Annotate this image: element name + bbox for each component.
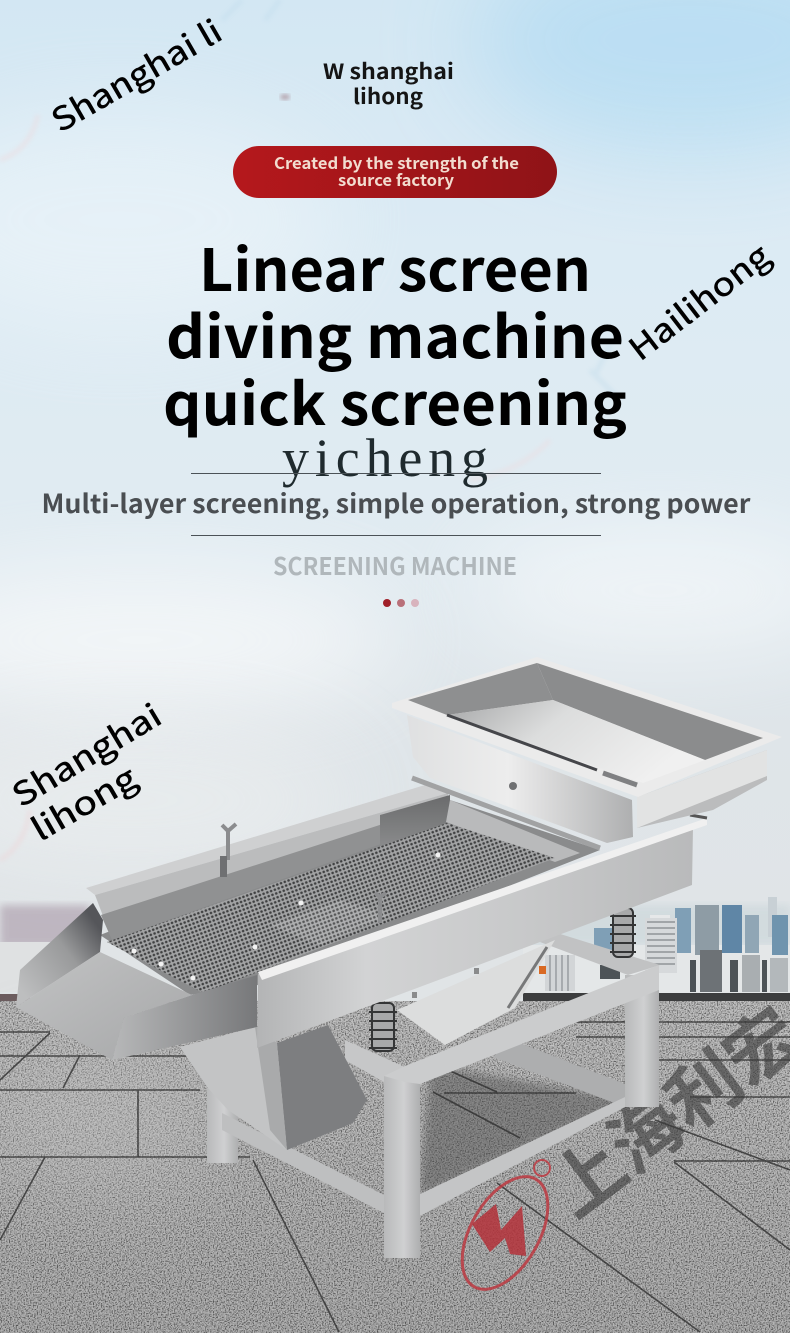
background: sky <box>0 0 790 1010</box>
machine: lower discharge chute <box>180 1025 367 1150</box>
badge: source factory pill <box>233 146 557 198</box>
subtitle: yicheng: yicheng <box>282 428 488 488</box>
background: distant city skyline <box>0 897 790 1002</box>
machine: feed hopper <box>392 657 782 848</box>
machine: adjusting bolts <box>220 824 386 923</box>
machine: floor stand <box>207 933 660 1258</box>
left label: Shanghai lihong: lihong <box>22 753 145 851</box>
main title: quick screening <box>163 358 627 442</box>
machine: under funnel <box>397 940 555 1045</box>
top label: Shanghai li: Shanghai li <box>42 7 230 142</box>
machine: front side panel <box>257 815 707 1048</box>
left label: Shanghai lihong <box>2 691 169 851</box>
machine: left discharge chute <box>16 903 257 1060</box>
main title <box>163 224 627 442</box>
watermark: red logo <box>445 1160 565 1304</box>
heading: W shanghai lihong: lihong <box>353 81 423 111</box>
machine: mesh screen <box>107 823 555 993</box>
machine: springs <box>369 908 636 1051</box>
rules around tagline <box>191 474 601 536</box>
left label: Shanghai lihong: Shanghai <box>2 691 169 817</box>
machine: screen deck frame <box>86 785 600 995</box>
english label: SCREENING MACHINE: SCREENING MACHINE <box>273 547 517 582</box>
background: paved floor <box>0 1001 790 1333</box>
badge: source factory pill: Created by the strength of the <box>274 150 519 174</box>
badge: source factory pill: source factory <box>338 167 454 191</box>
main title: diving machine <box>166 291 624 375</box>
main title: Linear screen <box>199 224 591 308</box>
heading: W shanghai lihong: W shanghai <box>323 56 454 86</box>
tagline: Multi-layer screening, simple operation, strong power <box>42 484 751 521</box>
background: faint logo watermarks <box>0 0 620 860</box>
heading: W shanghai lihong <box>323 56 454 111</box>
pagination dots <box>383 599 419 607</box>
side label: Hailihong: Hailihong <box>618 232 779 370</box>
